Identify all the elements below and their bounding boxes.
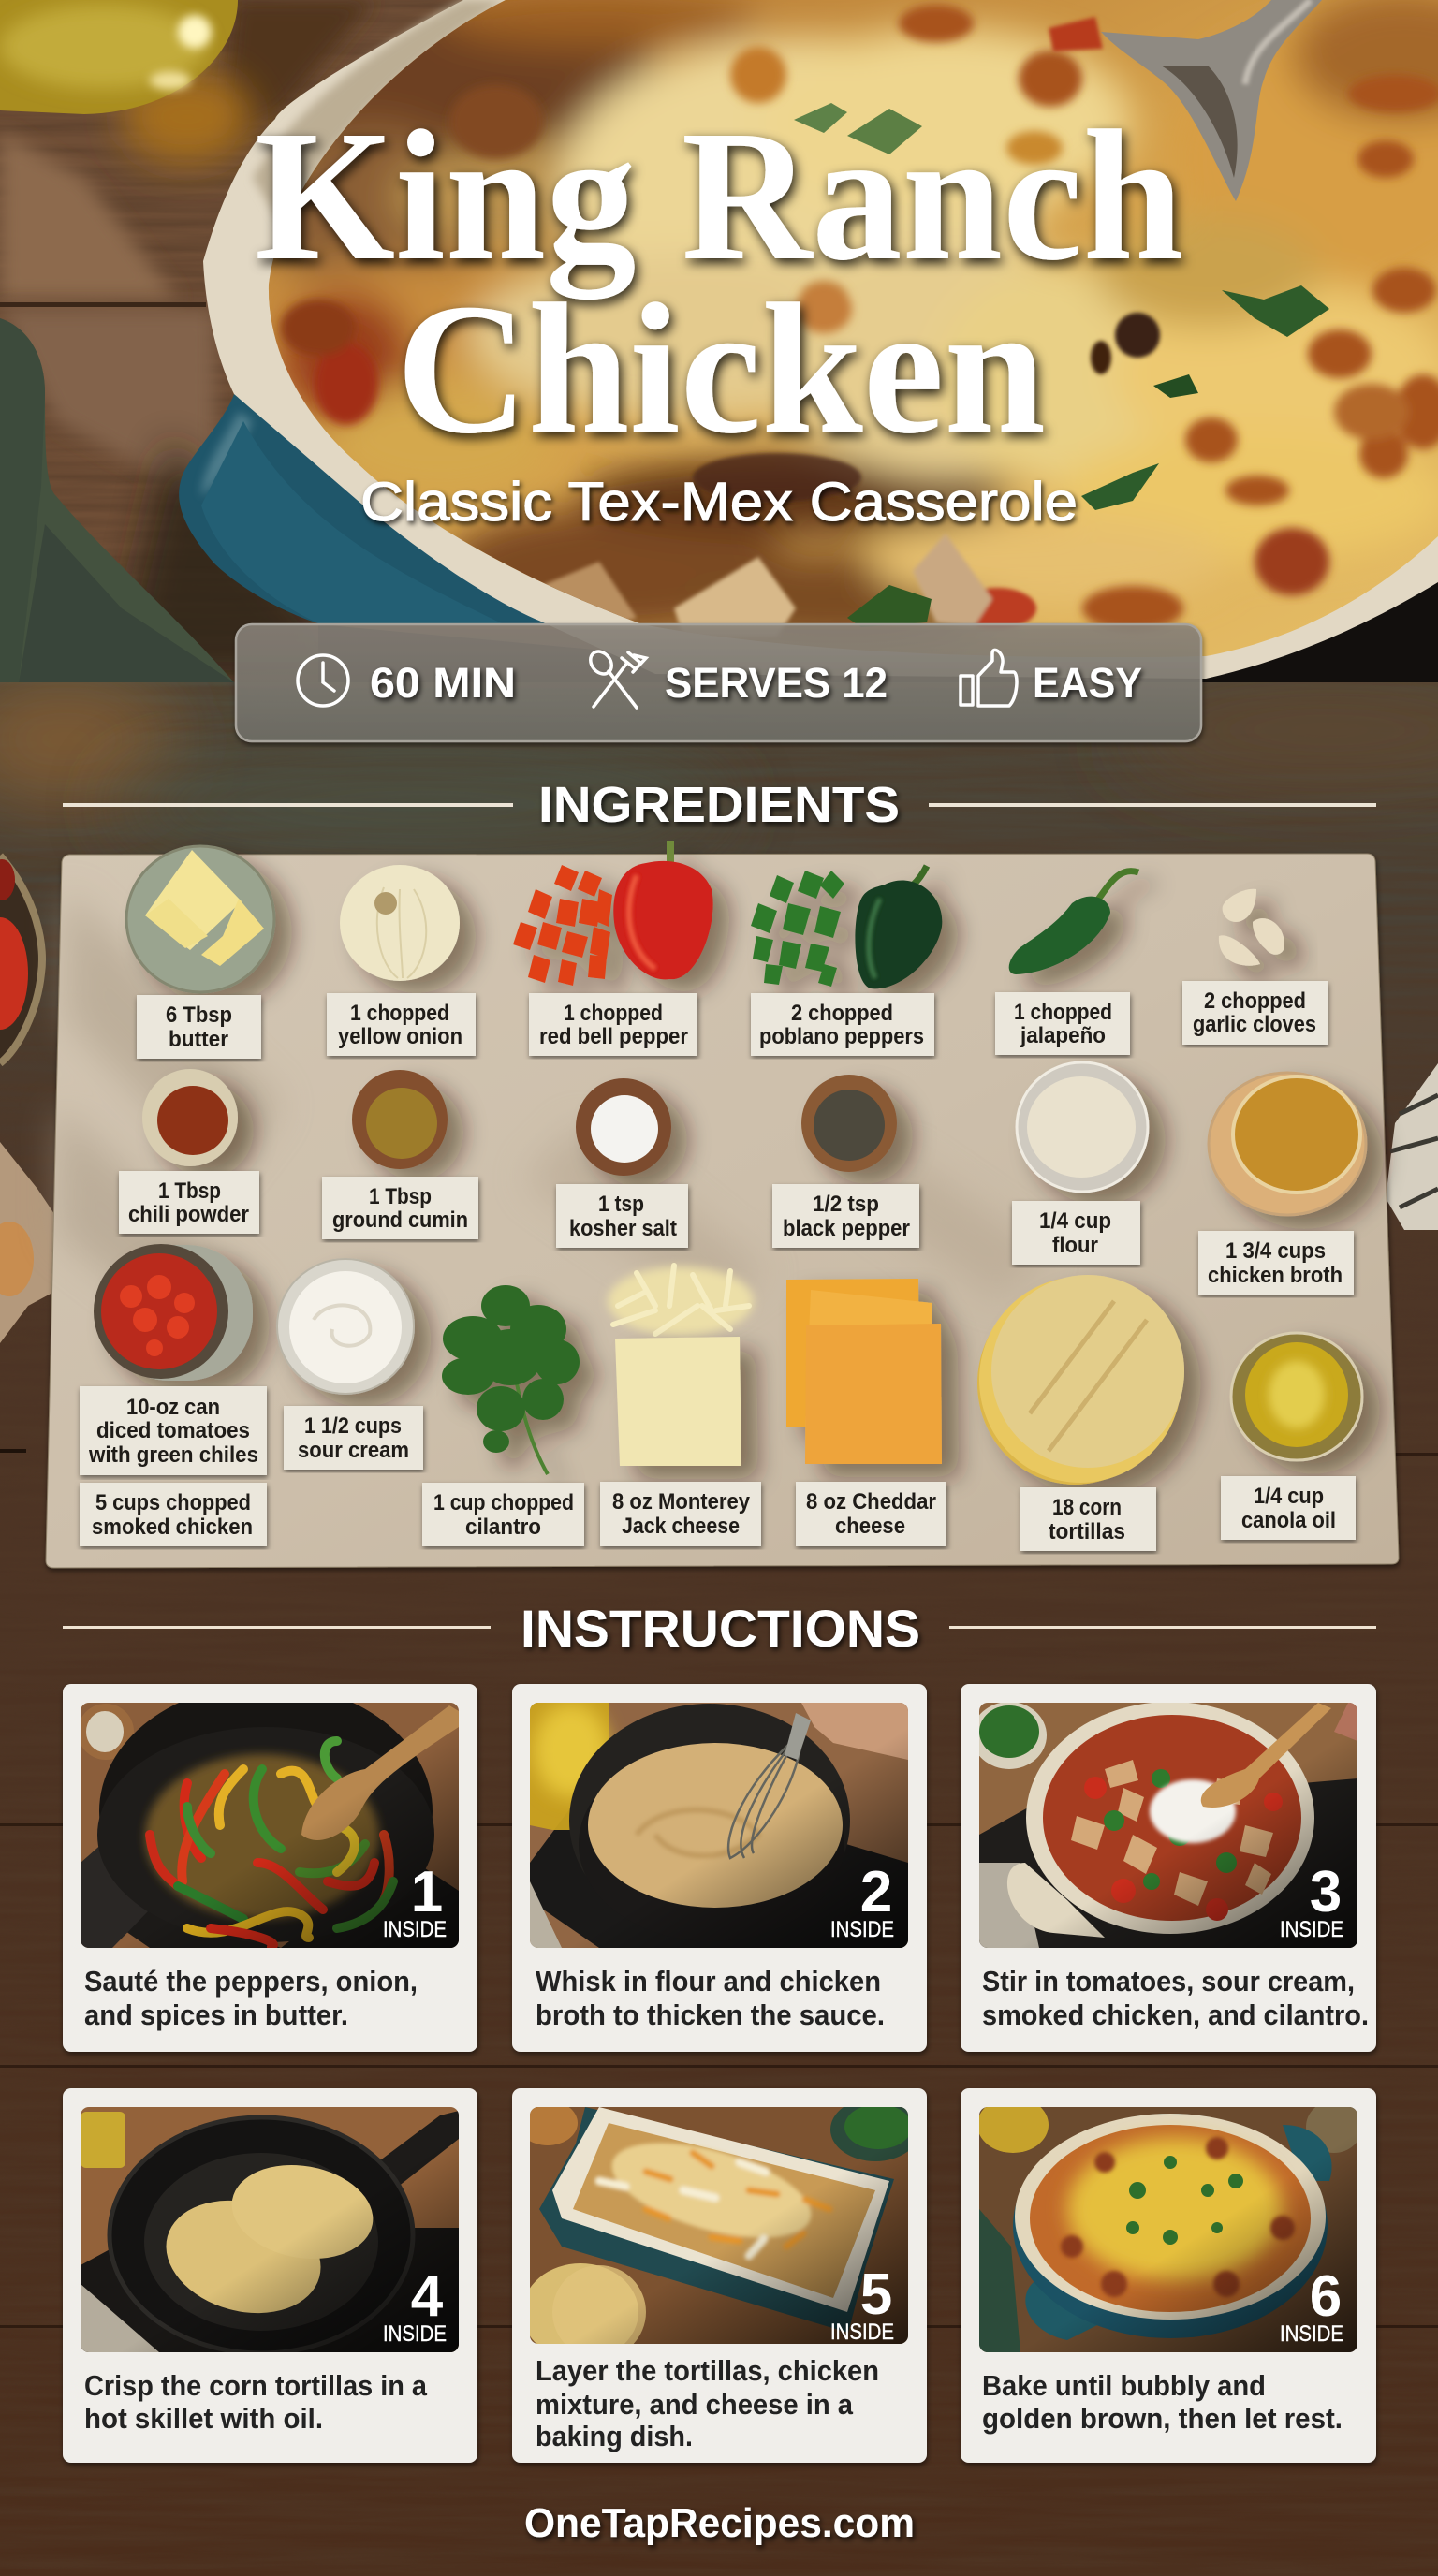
step 5 card <box>512 2088 927 2463</box>
label: chicken broth: chicken broth <box>1208 1263 1343 1288</box>
icon: thumbs up <box>961 650 1017 706</box>
step number 5: 5 <box>860 2262 892 2327</box>
label: salt <box>556 1184 688 1248</box>
ingredient: garlic <box>1219 889 1284 966</box>
ingredient: Cheddar <box>786 1279 942 1464</box>
ingredient: chili powder <box>142 1069 238 1166</box>
title: King Ranch <box>255 93 1183 300</box>
heading: instructions <box>63 1599 1376 1658</box>
herbs <box>794 103 1329 627</box>
label: garlic: 2 chopped <box>1204 988 1306 1014</box>
label: cumin: ground cumin <box>332 1208 468 1233</box>
label: smoked chicken: 5 cups chopped <box>95 1490 251 1515</box>
step number 3: INSIDE <box>1280 1917 1343 1942</box>
ingredient: salt <box>576 1078 671 1176</box>
label: black pepper: 1/2 tsp <box>813 1192 879 1217</box>
step 4 text <box>84 2369 428 2435</box>
label: Monterey Jack: Jack cheese <box>622 1514 740 1539</box>
food <box>268 0 1438 656</box>
label: black pepper <box>772 1184 919 1248</box>
green cloth napkin <box>0 318 317 682</box>
step number 4: 4 <box>411 2264 444 2329</box>
label: canola oil <box>1221 1476 1356 1540</box>
step 1 text: and spices in butter. <box>84 1998 348 2031</box>
ingredient: canola oil <box>1231 1333 1362 1460</box>
label: Monterey Jack <box>600 1482 761 1546</box>
label: jalapeno: 1 chopped <box>1014 1000 1112 1025</box>
ingredient: chicken broth <box>1209 1073 1366 1215</box>
step number 1 <box>383 1860 447 1942</box>
step 3 card <box>961 1684 1376 2052</box>
label: salt: kosher salt <box>569 1216 677 1241</box>
label: cilantro: cilantro <box>465 1515 541 1540</box>
label: garlic <box>1182 981 1328 1045</box>
footer: OneTapRecipes.com <box>524 2500 915 2546</box>
label: butter: butter <box>169 1027 228 1052</box>
browned spots <box>281 5 1438 631</box>
label: onion: yellow onion <box>338 1024 462 1049</box>
label: tortillas <box>1020 1487 1156 1551</box>
step number 6 <box>1280 2264 1343 2347</box>
step 6 text <box>982 2369 1343 2435</box>
ingredient: Monterey Jack <box>608 1266 754 1466</box>
icon: utensils <box>586 648 646 708</box>
label: butter: 6 Tbsp <box>166 1003 232 1028</box>
step 1 card <box>63 1684 477 2052</box>
ingredient: cilantro <box>442 1285 580 1474</box>
label: cilantro <box>422 1483 584 1546</box>
label: red bell pepper: red bell pepper <box>539 1024 688 1049</box>
time: 60 MIN <box>370 659 516 707</box>
label: flour <box>1012 1201 1140 1265</box>
table shading <box>0 0 374 505</box>
step 4 photo <box>81 2107 459 2353</box>
ingredient: jalapeno <box>1009 871 1138 974</box>
step 2 photo <box>530 1703 908 1948</box>
heading: ingredients <box>63 777 1376 833</box>
step 4 text: hot skillet with oil. <box>84 2402 323 2435</box>
label: sour cream: 1 1/2 cups <box>304 1413 402 1439</box>
label: onion: 1 chopped <box>350 1001 449 1026</box>
step 5 photo <box>518 2098 920 2361</box>
label: poblano <box>751 993 934 1056</box>
label: red bell pepper: 1 chopped <box>564 1001 663 1026</box>
step 5 text: mixture, and cheese in a <box>536 2388 854 2421</box>
step 1 text <box>84 1965 418 2031</box>
step number 2 <box>830 1860 894 1942</box>
hero photo: casserole <box>0 0 1438 682</box>
heading: ingredients: INGREDIENTS <box>538 777 900 833</box>
step 5 text: Layer the tortillas, chicken <box>536 2354 879 2387</box>
label: red bell pepper <box>529 993 697 1056</box>
step number 4 <box>383 2264 447 2347</box>
label: smoked chicken: smoked chicken <box>92 1515 253 1540</box>
step 6 text: Bake until bubbly and <box>982 2369 1266 2402</box>
step 2 text: Whisk in flour and chicken <box>536 1965 881 1998</box>
step number 5: INSIDE <box>830 2320 894 2345</box>
step number 2: INSIDE <box>830 1917 894 1942</box>
label: jalapeno <box>995 992 1130 1055</box>
label: flour: 1/4 cup <box>1039 1208 1111 1234</box>
tomatoes and chicken <box>543 17 1160 637</box>
step 3 text <box>982 1965 1369 2031</box>
spoon <box>1101 0 1322 201</box>
ingredient: cumin <box>352 1070 448 1169</box>
label: canned tomatoes: 10-oz can <box>126 1395 220 1420</box>
label: chili powder: chili powder <box>128 1202 249 1227</box>
label: flour: flour <box>1052 1233 1098 1258</box>
label: tortillas: tortillas <box>1049 1519 1125 1544</box>
step 6 photo <box>977 2097 1362 2352</box>
label: Cheddar: 8 oz Cheddar <box>806 1489 936 1515</box>
step 1 text: Sauté the peppers, onion, <box>84 1965 418 1998</box>
icon: clock <box>298 655 348 706</box>
dark under dish <box>318 582 1438 682</box>
label: cumin <box>322 1177 478 1239</box>
step number 1: INSIDE <box>383 1917 447 1942</box>
difficulty: EASY <box>1033 659 1142 707</box>
ingredient: onion <box>340 865 460 981</box>
title: Chicken <box>396 266 1046 473</box>
label: canola oil: 1/4 cup <box>1254 1484 1324 1509</box>
dish rim <box>203 0 1438 679</box>
step 3 photo <box>972 1702 1357 1948</box>
info bar <box>236 624 1201 741</box>
step number 2: 2 <box>860 1860 892 1925</box>
label: canned tomatoes <box>80 1386 267 1475</box>
ingredient: flour <box>1017 1062 1148 1192</box>
label: smoked chicken <box>80 1483 267 1546</box>
side props <box>0 856 1438 1343</box>
label: cumin: 1 Tbsp <box>369 1184 432 1209</box>
step 2 text <box>536 1965 885 2031</box>
step number 6: 6 <box>1310 2264 1342 2329</box>
label: sour cream: sour cream <box>298 1438 409 1463</box>
step 3 text: smoked chicken, and cilantro. <box>982 1998 1369 2031</box>
panel: ingredients board <box>46 841 1399 1568</box>
ingredient labels <box>80 981 1356 1551</box>
ingredient: tortillas <box>977 1275 1184 1485</box>
baking dish teal handle <box>179 394 552 625</box>
board shading <box>56 889 1049 1348</box>
label: onion <box>327 993 476 1056</box>
label: cilantro: 1 cup chopped <box>433 1490 574 1515</box>
label: black pepper: black pepper <box>783 1216 910 1241</box>
label: sour cream <box>284 1406 423 1470</box>
label: poblano: 2 chopped <box>791 1001 893 1026</box>
wood background <box>0 674 1438 2576</box>
label: Monterey Jack: 8 oz Monterey <box>612 1489 751 1515</box>
step 4 card <box>63 2088 477 2463</box>
label: butter <box>137 995 261 1059</box>
label: chicken broth: 1 3/4 cups <box>1225 1238 1326 1264</box>
subtitle: Classic Tex-Mex Casserole <box>360 472 1078 533</box>
label: chili powder: 1 Tbsp <box>158 1178 221 1204</box>
label: Cheddar: cheese <box>835 1514 905 1539</box>
label: salt: 1 tsp <box>598 1192 644 1217</box>
label: garlic: garlic cloves <box>1193 1012 1316 1037</box>
label: jalapeno: jalapeño <box>1020 1023 1106 1048</box>
step 2 text: broth to thicken the sauce. <box>536 1998 885 2031</box>
step 5 text: baking dish. <box>536 2420 693 2452</box>
step 5 text <box>536 2354 879 2452</box>
label: chili powder <box>119 1171 259 1234</box>
step 6 card <box>961 2088 1376 2463</box>
ingredient: poblano peppers <box>751 866 942 988</box>
ingredient: canned tomatoes <box>94 1244 253 1381</box>
step number 1: 1 <box>411 1860 443 1925</box>
step number 5 <box>830 2262 894 2345</box>
label: poblano: poblano peppers <box>759 1024 924 1049</box>
servings: SERVES 12 <box>665 659 888 707</box>
step 2 card <box>512 1684 927 2052</box>
ingredient: red bell pepper <box>513 841 713 986</box>
label: tortillas: 18 corn <box>1052 1495 1122 1520</box>
label: chicken broth <box>1198 1231 1354 1295</box>
step 4 text: Crisp the corn tortillas in a <box>84 2369 428 2402</box>
step number 4: INSIDE <box>383 2321 447 2347</box>
heading: instructions: INSTRUCTIONS <box>521 1599 920 1658</box>
step 6 text: golden brown, then let rest. <box>982 2402 1343 2435</box>
title <box>255 93 1183 473</box>
label: Cheddar <box>796 1482 946 1546</box>
step number 3 <box>1280 1860 1343 1942</box>
step 1 photo <box>78 1684 459 1948</box>
step number 6: INSIDE <box>1280 2321 1343 2347</box>
step 3 text: Stir in tomatoes, sour cream, <box>982 1965 1355 1998</box>
step number 3: 3 <box>1310 1860 1342 1925</box>
ingredient: butter <box>126 846 274 992</box>
icon: glass of oil <box>0 0 238 114</box>
ingredient: sour cream <box>277 1259 414 1394</box>
label: canned tomatoes: with green chiles <box>88 1442 258 1468</box>
label: canola oil: canola oil <box>1241 1508 1336 1533</box>
label: canned tomatoes: diced tomatoes <box>96 1418 250 1443</box>
ingredient: black pepper <box>801 1075 897 1172</box>
